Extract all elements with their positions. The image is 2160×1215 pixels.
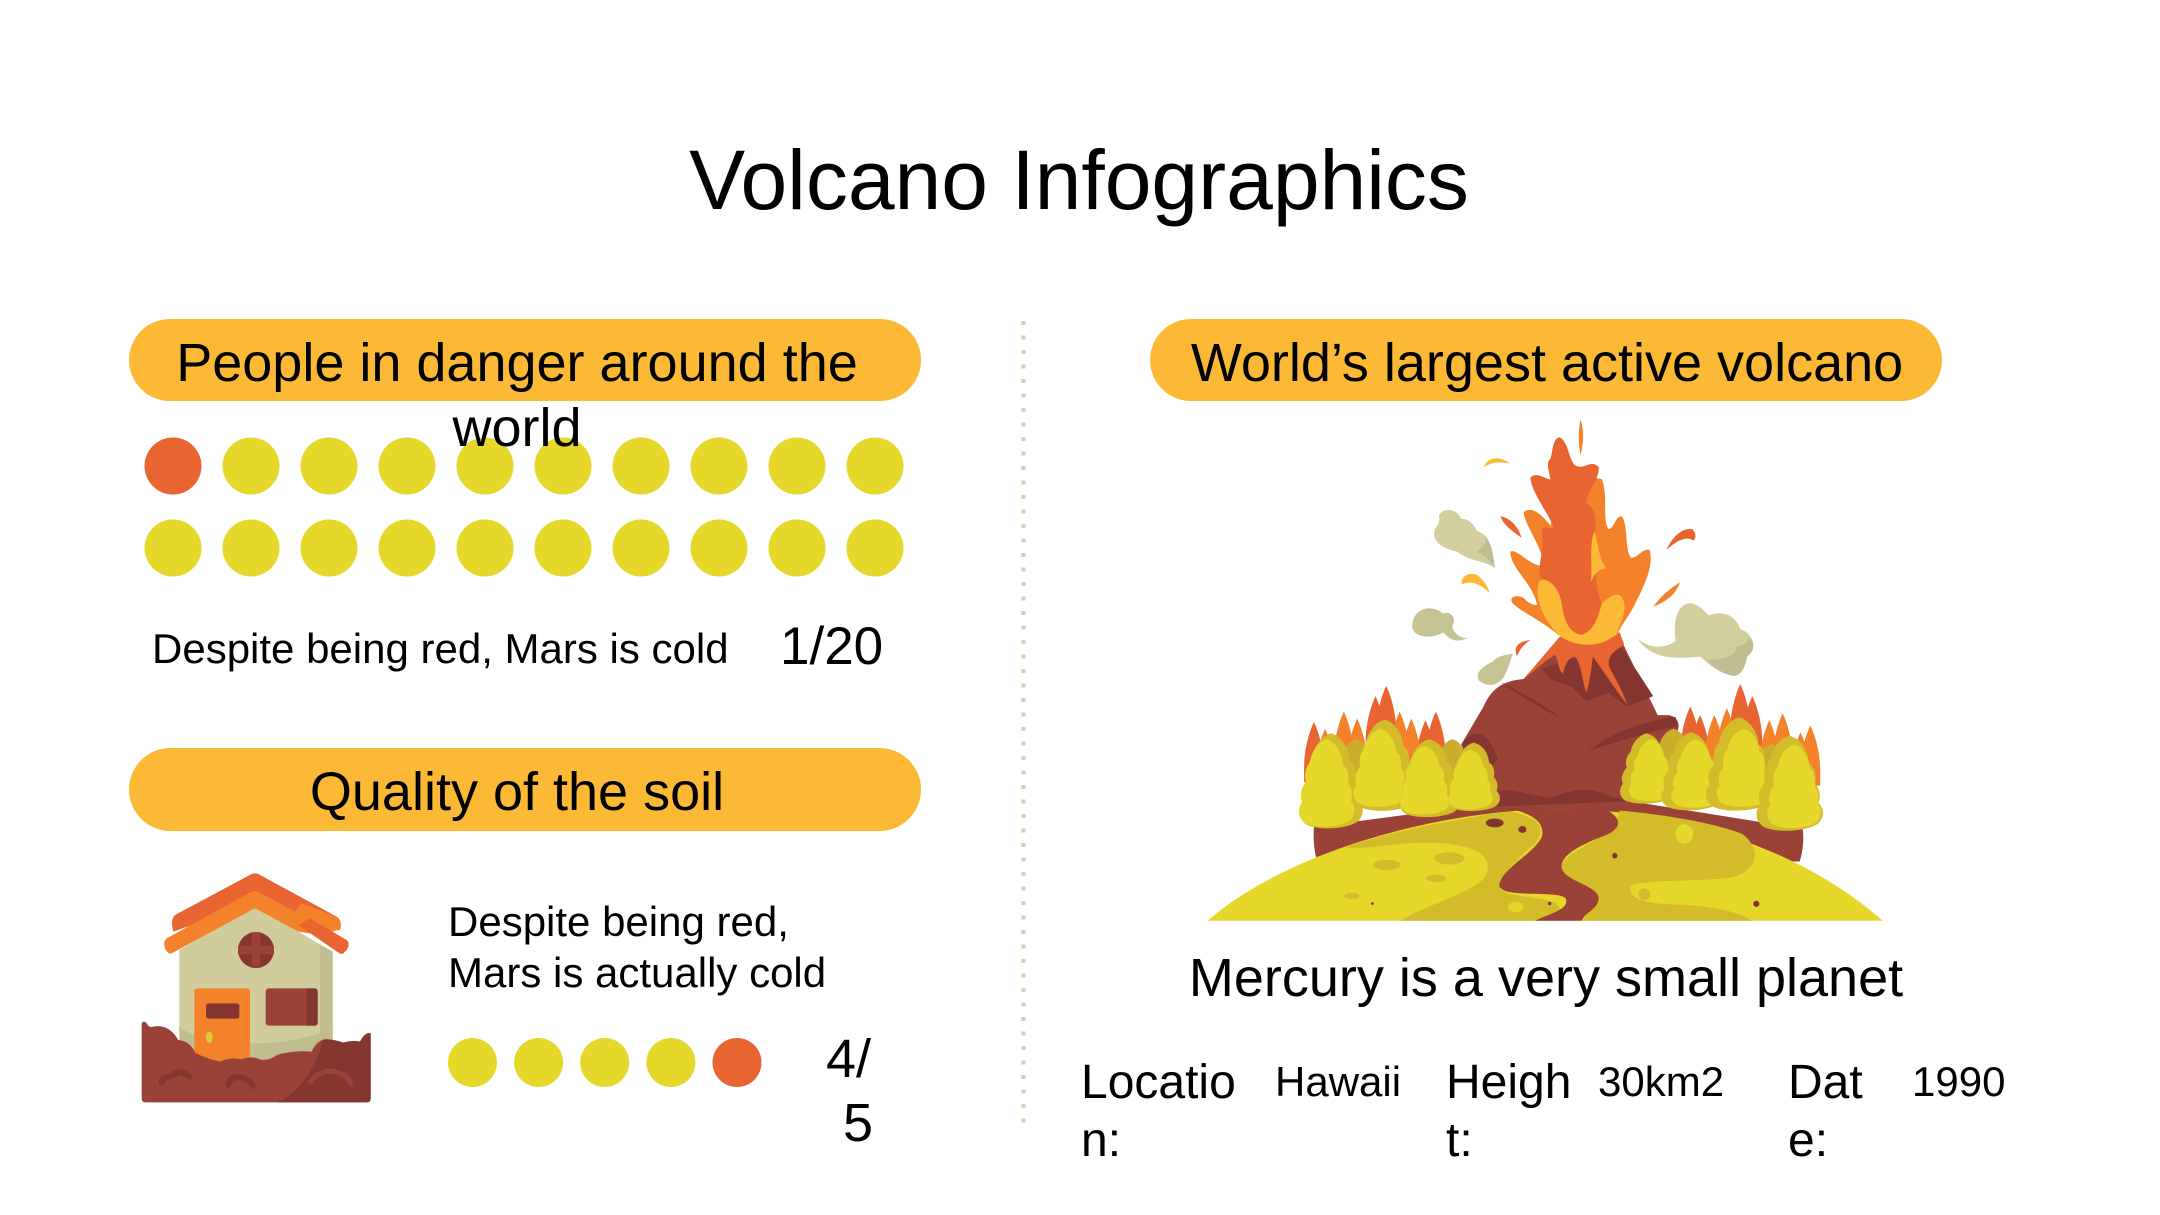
caption: mars is actually cold: Despite being red,	[448, 898, 789, 945]
heading text: quality of the soil: Quality of the soil	[310, 762, 724, 822]
label: height: Heigh	[1446, 1056, 1571, 1109]
panel: people in danger	[129, 319, 921, 676]
caption: mercury: Mercury is a very small planet	[1189, 948, 1903, 1008]
left trees	[1299, 720, 1500, 828]
dot row 1	[144, 438, 904, 494]
right trees	[1620, 718, 1823, 831]
label: height: t:	[1446, 1114, 1473, 1167]
heading text: largest volcano: World’s largest active volcano	[1191, 333, 1903, 393]
label: date: Dat	[1788, 1056, 1863, 1109]
icon: house	[142, 873, 371, 1102]
panel: quality of the soil	[129, 748, 921, 1153]
label: location: n:	[1081, 1114, 1121, 1167]
dot row 2	[144, 520, 904, 576]
heading pill: quality of the soil	[129, 748, 921, 831]
heading text: people in danger: People in danger around the	[176, 333, 858, 393]
heading pill: people in danger	[129, 319, 921, 401]
value: hawaii: Hawaii	[1275, 1058, 1401, 1105]
stat: 4/5: 4/	[826, 1029, 871, 1089]
trunks band	[1314, 801, 1803, 861]
lava flames	[1510, 437, 1651, 645]
mountain	[1461, 632, 1679, 813]
value: 1990: 1990	[1912, 1058, 2005, 1105]
flames behind trees	[1304, 684, 1820, 793]
ground hill	[1208, 809, 1883, 921]
stat: 4/5: 5	[843, 1093, 873, 1153]
illustration: erupting volcano	[1208, 419, 1883, 921]
dot row: soil rating	[448, 1038, 762, 1087]
value: 30km2: 30km2	[1598, 1058, 1724, 1105]
heading pill: largest volcano	[1150, 319, 1942, 401]
label: location: Locatio	[1081, 1056, 1236, 1109]
heading text: people in danger: world	[451, 398, 582, 458]
smoke clouds	[1412, 510, 1753, 685]
caption: mars is cold: Despite being red, Mars is cold	[152, 625, 729, 672]
label: date: e:	[1788, 1114, 1828, 1167]
lava sparks	[1462, 419, 1695, 657]
caption: mars is actually cold: Mars is actually cold	[448, 949, 826, 996]
panel: world's largest active volcano	[1081, 319, 2005, 1167]
stat: 1/20: 1/20	[780, 617, 883, 676]
title: Volcano Infographics	[689, 133, 1469, 227]
